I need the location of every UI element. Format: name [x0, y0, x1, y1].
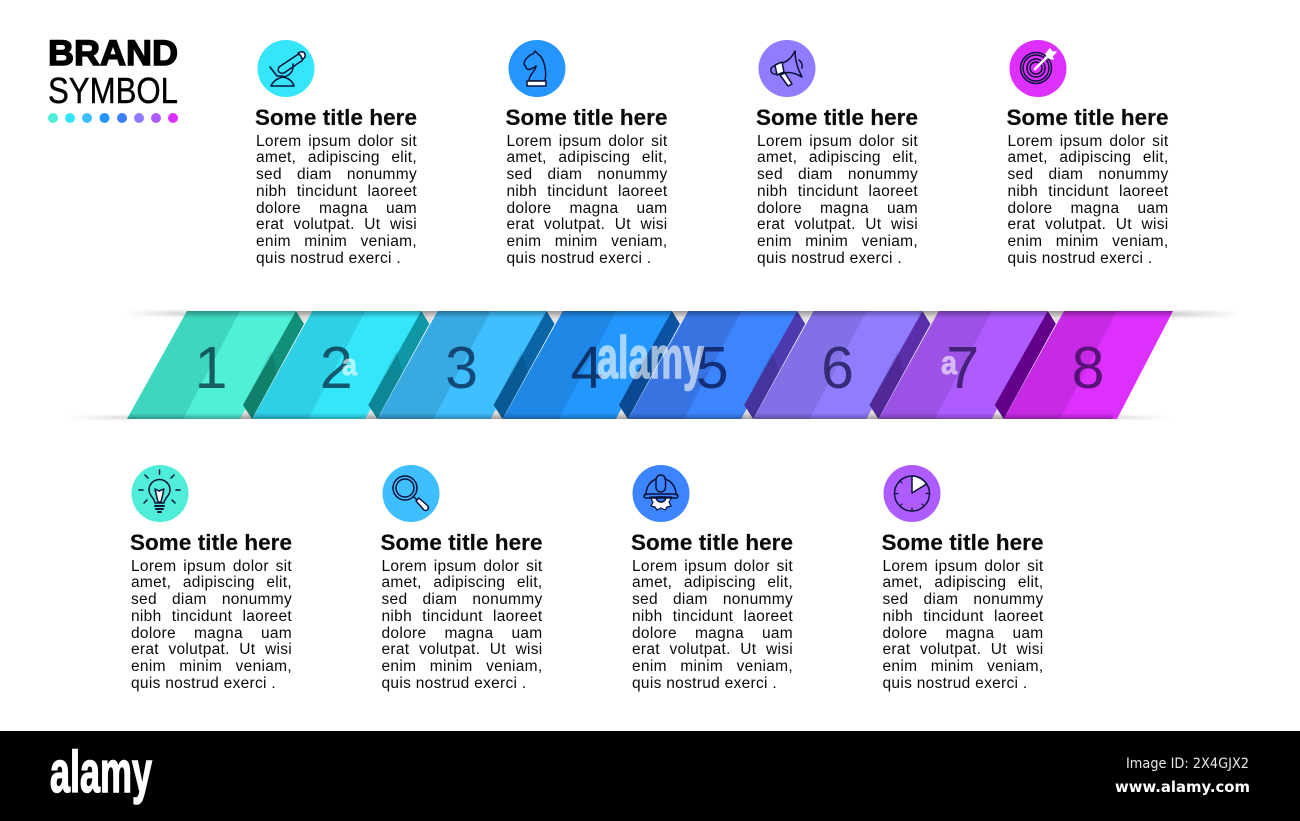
icon: target	[1010, 40, 1066, 97]
text block: erat volutpat. Ut wisi	[757, 216, 918, 233]
panel: step 6 megaphone	[756, 40, 918, 267]
text block: dolore magna uam	[382, 625, 542, 642]
text block: nibh tincidunt laoreet	[632, 608, 793, 625]
segment 3	[378, 311, 555, 419]
watermark: a	[941, 344, 958, 381]
text block: nibh tincidunt laoreet	[382, 608, 542, 625]
text block: dolore magna uam	[632, 625, 793, 642]
segment 4	[503, 311, 680, 419]
text block: Lorem ipsum dolor sit	[882, 558, 1044, 574]
brand name	[48, 34, 178, 111]
text block: Lorem ipsum dolor sit	[1008, 132, 1168, 150]
text block: quis nostrud exerci .	[131, 675, 276, 692]
title: Some title here	[255, 105, 417, 130]
segment 6: 6	[821, 335, 854, 401]
title: Some title here	[756, 105, 918, 130]
text block	[632, 558, 793, 692]
panel: step 4 chess knight	[506, 40, 668, 267]
text block: amet, adipiscing elit,	[506, 149, 668, 166]
text block	[882, 558, 1044, 692]
text block: Lorem ipsum dolor sit	[382, 558, 542, 574]
brand name: BRAND	[48, 34, 178, 73]
text block: quis nostrud exerci .	[382, 675, 527, 692]
text block	[131, 558, 292, 692]
panel: step 2 microscope	[255, 40, 417, 267]
text block: enim minim veniam,	[382, 658, 542, 675]
image id: Image ID: 2X4GJX2	[1126, 756, 1249, 772]
band end shadows	[65, 311, 1240, 419]
panel: step 1 light bulb	[130, 465, 292, 692]
text block: quis nostrud exerci .	[882, 675, 1028, 692]
gap notches	[240, 311, 1064, 419]
panel: step 3 magnifier	[380, 465, 543, 692]
segment 6	[754, 311, 930, 419]
text block: sed diam nonummy	[382, 591, 542, 608]
text block: enim minim veniam,	[506, 233, 668, 250]
text block: dolore magna uam	[506, 200, 668, 217]
text block: sed diam nonummy	[882, 591, 1044, 608]
text block: nibh tincidunt laoreet	[506, 183, 668, 200]
text block: erat volutpat. Ut wisi	[506, 216, 668, 233]
text block: dolore magna uam	[256, 200, 417, 217]
text block: dolore magna uam	[757, 200, 918, 217]
panel: step 5 helmet and gear	[631, 465, 793, 692]
brand name: SYMBOL	[48, 70, 178, 111]
text block: amet, adipiscing elit,	[632, 574, 793, 591]
segment 1: 1	[195, 335, 227, 401]
title: Some title here	[1006, 105, 1169, 130]
icon: light bulb	[132, 465, 188, 522]
watermark: alamy	[597, 325, 704, 391]
text block: nibh tincidunt laoreet	[131, 608, 292, 625]
text block: quis nostrud exerci .	[506, 250, 652, 267]
text block	[382, 558, 542, 692]
text block	[506, 132, 668, 267]
text block: amet, adipiscing elit,	[757, 149, 918, 166]
title: Some title here	[506, 105, 668, 130]
website: www.alamy.com	[1115, 778, 1250, 796]
brand logo	[48, 34, 178, 123]
text block: quis nostrud exerci .	[256, 250, 401, 267]
segment 8	[1004, 311, 1173, 419]
title: Some title here	[130, 530, 292, 555]
panel: step 7 clock	[882, 465, 1044, 692]
icon: clock	[884, 465, 940, 522]
icon: chess knight	[508, 40, 566, 97]
title: Some title here	[631, 530, 793, 555]
text block: Lorem ipsum dolor sit	[632, 558, 793, 574]
text block: Lorem ipsum dolor sit	[256, 132, 417, 150]
text block: enim minim veniam,	[1008, 233, 1168, 250]
text block: dolore magna uam	[1008, 200, 1168, 217]
text block	[1008, 132, 1168, 267]
text block: nibh tincidunt laoreet	[757, 183, 918, 200]
icon: microscope	[258, 40, 314, 97]
footer logo: alamy	[50, 740, 152, 805]
text block: amet, adipiscing elit,	[131, 574, 292, 591]
text block: enim minim veniam,	[632, 658, 793, 675]
segment 7	[879, 311, 1056, 419]
text block: sed diam nonummy	[506, 166, 668, 183]
colour dots	[48, 113, 178, 123]
numbered parallelogram band	[81, 310, 1228, 420]
text block: erat volutpat. Ut wisi	[131, 641, 292, 658]
text block	[256, 132, 417, 267]
text block: sed diam nonummy	[1008, 166, 1168, 183]
watermark	[342, 325, 958, 391]
text block: erat volutpat. Ut wisi	[632, 641, 793, 658]
text block: enim minim veniam,	[131, 658, 292, 675]
text block: amet, adipiscing elit,	[1008, 149, 1168, 166]
segment 5	[628, 311, 805, 419]
text block: Lorem ipsum dolor sit	[131, 558, 292, 574]
segment 8: 8	[1072, 335, 1104, 401]
text block: erat volutpat. Ut wisi	[882, 641, 1044, 658]
text block: enim minim veniam,	[256, 233, 417, 250]
text block: sed diam nonummy	[256, 166, 417, 183]
text block: quis nostrud exerci .	[632, 675, 777, 692]
text block: quis nostrud exerci .	[1008, 250, 1153, 267]
text block	[757, 132, 918, 267]
text block: dolore magna uam	[131, 625, 292, 642]
text block: amet, adipiscing elit,	[382, 574, 542, 591]
icon: megaphone	[758, 40, 816, 97]
text block: erat volutpat. Ut wisi	[1008, 216, 1168, 233]
text block: sed diam nonummy	[131, 591, 292, 608]
watermark: a	[342, 347, 358, 382]
segment 2	[252, 311, 429, 419]
icon: helmet and gear	[632, 465, 690, 522]
title: Some title here	[882, 530, 1044, 555]
text block: amet, adipiscing elit,	[882, 574, 1044, 591]
text block: Lorem ipsum dolor sit	[506, 132, 668, 150]
text block: enim minim veniam,	[757, 233, 918, 250]
text block: nibh tincidunt laoreet	[882, 608, 1044, 625]
text block: sed diam nonummy	[632, 591, 793, 608]
segment 2: 2	[320, 335, 353, 401]
segment 1	[127, 311, 304, 419]
text block: sed diam nonummy	[757, 166, 918, 183]
title: Some title here	[380, 530, 543, 555]
text block: quis nostrud exerci .	[757, 250, 902, 267]
text block: erat volutpat. Ut wisi	[382, 641, 542, 658]
panel: step 8 target	[1006, 40, 1169, 267]
text block: dolore magna uam	[882, 625, 1044, 642]
text block: enim minim veniam,	[882, 658, 1044, 675]
segment 5: 5	[696, 335, 729, 401]
footer bar	[0, 731, 1300, 821]
segment 4: 4	[570, 335, 603, 401]
text block: nibh tincidunt laoreet	[256, 183, 417, 200]
text block: amet, adipiscing elit,	[256, 149, 417, 166]
text block: nibh tincidunt laoreet	[1008, 183, 1168, 200]
text block: erat volutpat. Ut wisi	[256, 216, 417, 233]
text block: Lorem ipsum dolor sit	[757, 132, 918, 150]
segment 7: 7	[946, 335, 979, 401]
icon: magnifier	[382, 465, 440, 522]
segment 3: 3	[445, 335, 478, 401]
